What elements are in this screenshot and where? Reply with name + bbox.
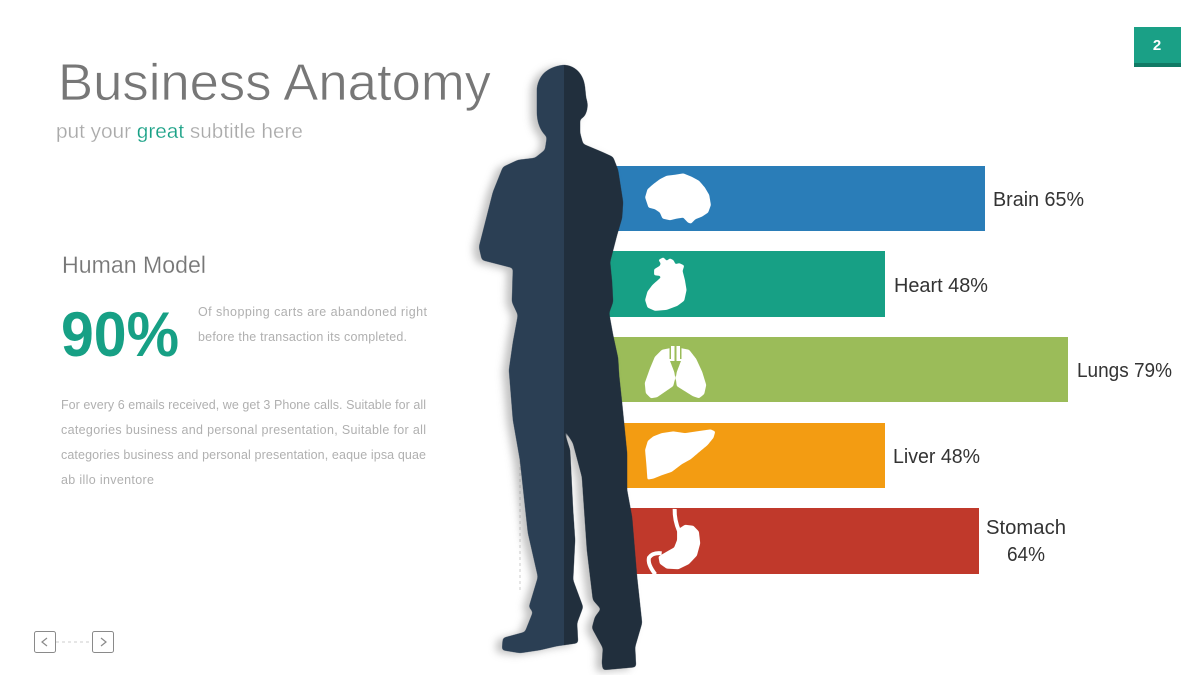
body paragraph: categories business and personal presentation, Suitable for all (61, 423, 426, 437)
icon: stomach (649, 509, 700, 574)
label: stomach: 64% (1007, 544, 1045, 566)
body paragraph: ab illo inventore (61, 473, 154, 487)
icon: lungs (645, 346, 706, 398)
icon: heart (645, 258, 686, 311)
label: liver: Liver 48% (893, 446, 980, 468)
body paragraph: categories business and personal presentation, eaque ipsa quae (61, 448, 426, 462)
bar: liver (600, 423, 885, 488)
human silhouette (470, 63, 642, 675)
stat description (198, 305, 428, 344)
subtitle: put your great subtitle here (56, 121, 303, 143)
icon: brain (645, 174, 711, 223)
page number tag (1134, 27, 1181, 67)
bar: stomach (600, 508, 979, 574)
heading: human model: Human Model (62, 252, 206, 279)
icon: liver (645, 430, 715, 479)
label: brain: Brain 65% (993, 189, 1084, 211)
label: heart: Heart 48% (894, 275, 988, 297)
navigation arrows (34, 632, 114, 652)
stat description: Of shopping carts are abandoned right (198, 305, 428, 319)
body paragraph: For every 6 emails received, we get 3 Phone calls. Suitable for all (61, 398, 426, 412)
title: Business Anatomy (58, 54, 491, 112)
page number tag: 2 (1153, 37, 1161, 54)
big number 90%: 90% (61, 300, 179, 370)
stat description: before the transaction its completed. (198, 330, 407, 344)
body paragraph (61, 398, 426, 487)
label: lungs: Lungs 79% (1077, 360, 1172, 382)
label: stomach: Stomach (986, 517, 1066, 539)
label: stomach (986, 517, 1066, 566)
bar: lungs (600, 337, 1068, 402)
panel: human model text (61, 252, 428, 487)
bar: brain (600, 166, 985, 231)
bar: heart (600, 251, 885, 317)
